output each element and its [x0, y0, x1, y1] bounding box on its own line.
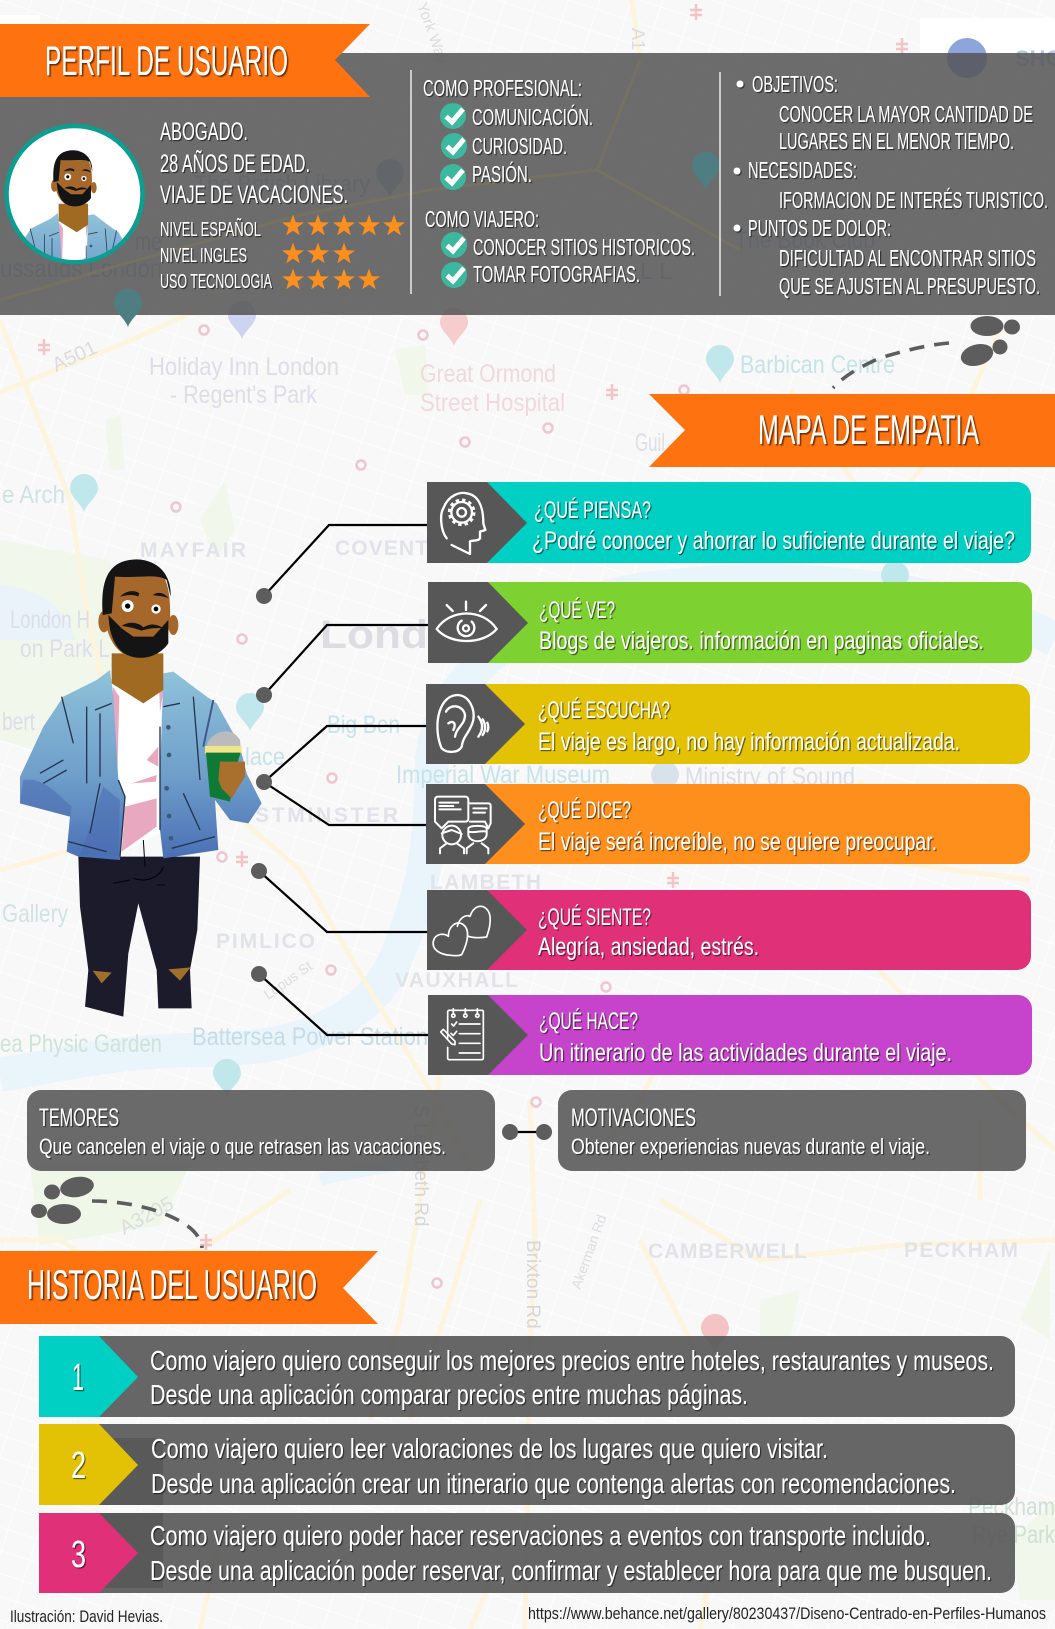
- text: objetivos, necesidades, puntos de dolor: NECESIDADES:: [748, 157, 857, 183]
- text: perfil basico: VIAJE DE VACACIONES.: [160, 181, 348, 209]
- panel: que dice: [426, 784, 1030, 864]
- text: que siente: ¿QUÉ SIENTE?: [538, 904, 651, 931]
- map labels: Street Hospital: [420, 389, 565, 417]
- map pins and markers: [38, 4, 909, 1352]
- text: que dice: ¿QUÉ DICE?: [538, 797, 631, 824]
- map labels: Barbican Centre: [740, 351, 895, 379]
- icon: stars rating: [282, 214, 405, 289]
- panel: historia 2: Como viajero quiero leer valoraciones de los lugares que quiero visitar.: [151, 1433, 828, 1464]
- map labels: STMINSTER: [255, 804, 398, 827]
- text: que hace: Un itinerario de las actividades durante el viaje.: [539, 1039, 952, 1067]
- text: como profesional y viajero: [423, 75, 695, 287]
- map labels through panel: ussauds London: [0, 253, 162, 283]
- panel: que escucha: [426, 684, 1030, 764]
- text: como profesional y viajero: CONOCER SITIOS HISTORICOS.: [473, 234, 695, 260]
- map labels: Akerman Rd: [568, 1212, 609, 1291]
- map labels: Lond: [320, 613, 428, 657]
- map labels: Brixton Rd: [522, 1240, 543, 1329]
- text: que escucha: [538, 697, 960, 756]
- panel: perfil de usuario: [0, 53, 1055, 327]
- icon: checklist: [441, 1009, 483, 1060]
- footer credits: [10, 1604, 1046, 1626]
- map labels: lace: [245, 743, 285, 771]
- text: como profesional y viajero: COMUNICACIÓN.: [472, 104, 593, 130]
- connector: temores motivaciones: [502, 1124, 552, 1140]
- panel: historia 2: 2: [71, 1445, 86, 1487]
- map labels: e Arch: [2, 481, 65, 509]
- icon: hearts: [433, 906, 490, 956]
- text: objetivos, necesidades, puntos de dolor: [734, 71, 1048, 299]
- dividers: [411, 70, 720, 296]
- map labels: Ministry of Sound: [685, 763, 855, 791]
- icon: eye: [437, 602, 497, 641]
- text: que ve: [539, 597, 984, 655]
- map labels: Guil: [635, 429, 665, 457]
- text: objetivos, necesidades, puntos de dolor: PUNTOS DE DOLOR:: [748, 215, 891, 241]
- map labels: A3205: [116, 1193, 177, 1239]
- icon: ear: [437, 695, 488, 752]
- panel: historia 1: Desde una aplicación comparar precios entre muchas páginas.: [150, 1379, 748, 1410]
- icon: head with gear: [441, 493, 485, 554]
- illustration: man with coffee: [20, 559, 262, 1017]
- text: perfil basico: USO TECNOLOGIA: [160, 271, 272, 293]
- map labels: PIMLICO: [216, 930, 315, 953]
- icon: avatar: [4, 124, 145, 264]
- footprints bottom: [31, 1174, 202, 1248]
- heading: perfil de usuario: PERFIL DE USUARIO: [45, 37, 288, 84]
- text: que escucha: ¿QUÉ ESCUCHA?: [538, 697, 670, 724]
- text: perfil basico: 28 AÑOS DE EDAD.: [160, 149, 310, 178]
- map labels: Imperial War Museum: [396, 761, 610, 789]
- text: como profesional y viajero: COMO PROFESIONAL:: [423, 75, 582, 101]
- map labels: PECKHAM: [904, 1239, 1018, 1262]
- map labels through panel: The Book Club: [735, 227, 875, 254]
- text: que hace: ¿QUÉ HACE?: [539, 1008, 638, 1035]
- panel: motivaciones: [558, 1090, 1026, 1171]
- map labels: Battersea Power Station: [192, 1023, 428, 1051]
- text: perfil basico: NIVEL ESPAÑOL: [160, 217, 261, 241]
- map labels: London H: [10, 606, 90, 634]
- connectors: [251, 525, 428, 1035]
- map labels: A501: [49, 337, 100, 377]
- icon: check marks: [440, 103, 467, 288]
- map labels through panel: me: [135, 226, 162, 256]
- text: perfil basico: NIVEL INGLES: [160, 245, 247, 267]
- map labels: S Lambeth Rd: [410, 1105, 431, 1226]
- panel: temores: TEMORES: [39, 1104, 119, 1132]
- map labels through panel: The British Library: [194, 171, 370, 198]
- text: perfil basico: ABOGADO.: [160, 118, 248, 146]
- text: que ve: ¿QUÉ VE?: [539, 597, 615, 624]
- text: que siente: Alegría, ansiedad, estrés.: [538, 933, 759, 961]
- panel: que siente: [427, 890, 1031, 970]
- panel: historia 1: 1: [72, 1357, 84, 1399]
- map labels: Gallery: [2, 900, 68, 928]
- heading: perfil de usuario: [0, 24, 370, 97]
- map labels: VAUXHALL: [395, 969, 518, 992]
- map labels: LAMBETH: [430, 871, 541, 894]
- text: como profesional y viajero: TOMAR FOTOGRAFIAS.: [473, 261, 640, 287]
- text: objetivos, necesidades, puntos de dolor: OBJETIVOS:: [752, 71, 838, 97]
- map labels: Lupus St: [261, 958, 315, 1002]
- map labels: Big Ben: [327, 711, 400, 739]
- map labels: A1: [628, 28, 648, 50]
- map labels: bert: [2, 708, 35, 736]
- map labels: MAYFAIR: [140, 539, 246, 562]
- icon: two people talking: [435, 797, 491, 853]
- text: que siente: [538, 904, 759, 961]
- panel: motivaciones: MOTIVACIONES: [571, 1104, 696, 1132]
- heading: historia del usuario: HISTORIA DEL USUARIO: [27, 1261, 317, 1308]
- panel: historia 2: [39, 1424, 1015, 1505]
- map labels through panel: L L: [640, 258, 672, 285]
- heading: mapa de empatia: [649, 394, 1055, 467]
- text: que dice: [538, 797, 937, 856]
- text: como profesional y viajero: PASIÓN.: [472, 161, 532, 187]
- panel: que ve: [428, 582, 1032, 663]
- text: que piensa: ¿QUÉ PIENSA?: [534, 497, 651, 524]
- map labels: CAMBERWELL: [648, 1240, 807, 1263]
- text: perfil basico: [160, 118, 348, 293]
- map labels: Holiday Inn London: [149, 353, 339, 381]
- footprints top: [833, 316, 1020, 388]
- heading: historia del usuario: [0, 1251, 378, 1324]
- panel: historia 1: [39, 1336, 1015, 1417]
- text: que hace: [539, 1008, 952, 1067]
- map labels: Great Ormond: [420, 360, 556, 388]
- map labels: - Regent's Park: [170, 381, 317, 409]
- map labels: ea Physic Garden: [0, 1030, 162, 1058]
- panel: que piensa: [427, 482, 1031, 563]
- top right map card: [0, 15, 1055, 78]
- panel: historia 3: 3: [71, 1534, 86, 1576]
- panel: historia 3: [39, 1513, 1015, 1593]
- text: que dice: El viaje será increíble, no se quiere preocupar.: [538, 828, 937, 856]
- footer credits: Ilustración: David Hevias.: [10, 1607, 163, 1626]
- map labels: York Way: [413, 1, 451, 66]
- panel: que hace: [428, 995, 1032, 1075]
- panel: temores: [27, 1090, 495, 1171]
- panel: temores: Que cancelen el viaje o que retrasen las vacaciones.: [39, 1134, 446, 1159]
- map labels through panel: [0, 60, 875, 327]
- map labels: on Park L: [20, 635, 110, 663]
- text: que piensa: [532, 497, 1015, 555]
- map labels: COVENT: [335, 537, 428, 560]
- panel: motivaciones: Obtener experiencias nuevas durante el viaje.: [571, 1134, 930, 1159]
- text: como profesional y viajero: CURIOSIDAD.: [472, 133, 567, 159]
- text: como profesional y viajero: COMO VIAJERO:: [425, 206, 539, 232]
